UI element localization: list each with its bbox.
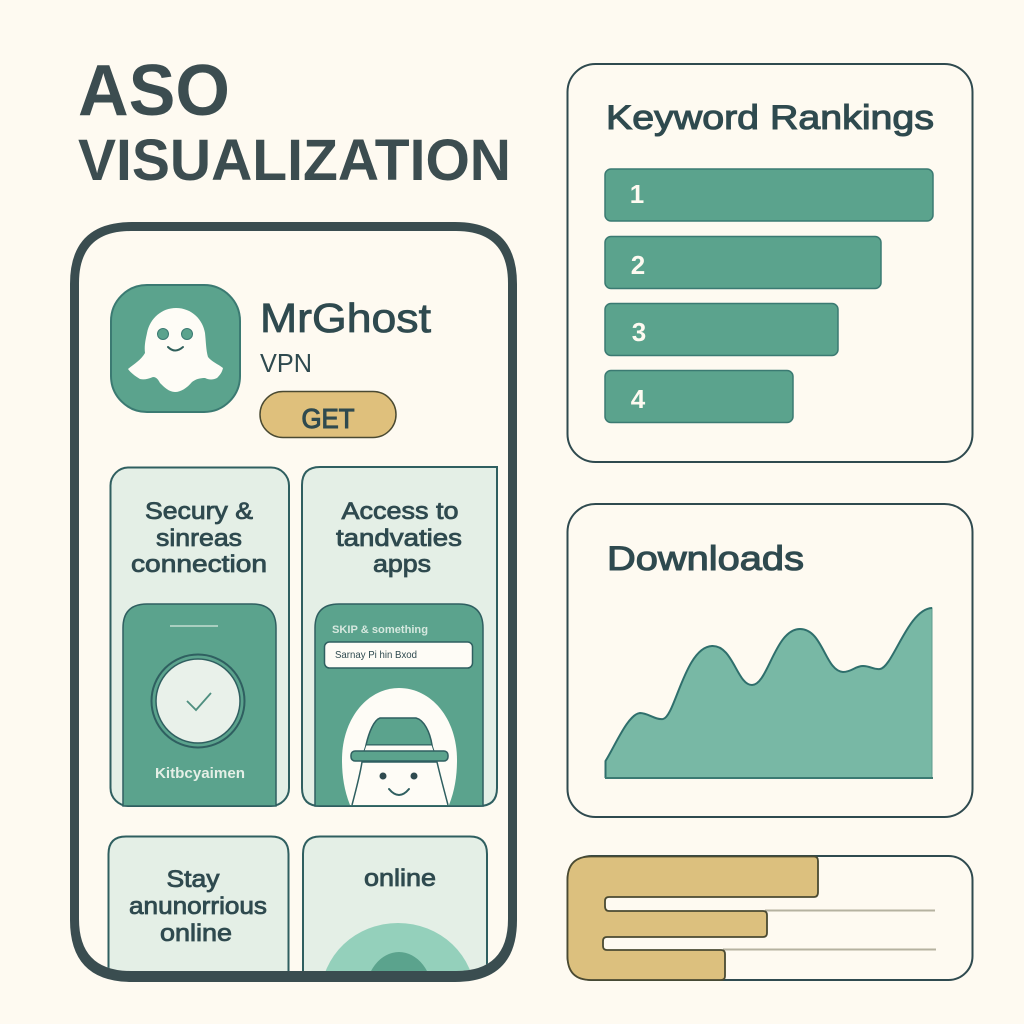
phone screen: search and ghost: Sarnay Pi hin Bxod (335, 649, 417, 661)
card heading: sinreas (156, 525, 242, 552)
panel: phone mockup (70, 222, 517, 1024)
screenshot card: stay anonymous: Stay (166, 866, 220, 893)
bar labels: 4 (631, 384, 646, 414)
panel: downloads (568, 504, 972, 817)
bar labels: 1 (630, 179, 644, 209)
screenshot card: secure connection (110, 468, 289, 806)
card heading: Secury & (145, 498, 253, 525)
title: VISUALIZATION (78, 128, 511, 193)
card heading: Access to (342, 498, 458, 525)
phone screen: search and ghost: SKIP & something (332, 624, 428, 636)
guide lines (723, 910, 936, 950)
app name: MrGhost (260, 295, 432, 341)
screenshot card: online: online (364, 865, 436, 892)
bar labels: 2 (631, 250, 645, 280)
screenshot card: access to apps (302, 467, 497, 806)
phone frame (70, 222, 517, 982)
heading: Keyword Rankings (606, 99, 934, 137)
phone screen: connected status: Kitbcyaimen (155, 765, 245, 782)
title: ASO (78, 51, 230, 131)
panel: gold bars (568, 856, 972, 980)
GET button: GET (302, 403, 354, 434)
phone screen: connected status (123, 604, 276, 806)
title (78, 51, 511, 193)
screenshot card: stay anonymous: anunorrious (129, 893, 267, 920)
bar labels (630, 179, 646, 414)
card heading: apps (373, 551, 431, 578)
screenshot card: stay anonymous: online (160, 920, 232, 947)
app category: VPN (260, 348, 312, 378)
illustration: arcs (326, 923, 470, 971)
screenshot card: online (302, 836, 488, 971)
icon: app ghost (111, 285, 240, 412)
illustration: ghost with hat (342, 688, 457, 805)
phone screen: search and ghost (315, 604, 483, 806)
area chart (605, 608, 933, 778)
bar labels: 3 (632, 317, 646, 347)
bar chart (605, 169, 933, 422)
card heading: connection (131, 551, 267, 578)
screenshot card: stay anonymous (108, 836, 290, 971)
card heading: tandvaties (336, 525, 462, 552)
panel: keyword rankings (568, 64, 972, 462)
card heading (336, 498, 462, 578)
GET button (260, 392, 396, 438)
card heading (132, 502, 266, 572)
heading: Downloads (607, 540, 804, 578)
stacked gold bars (568, 856, 818, 980)
